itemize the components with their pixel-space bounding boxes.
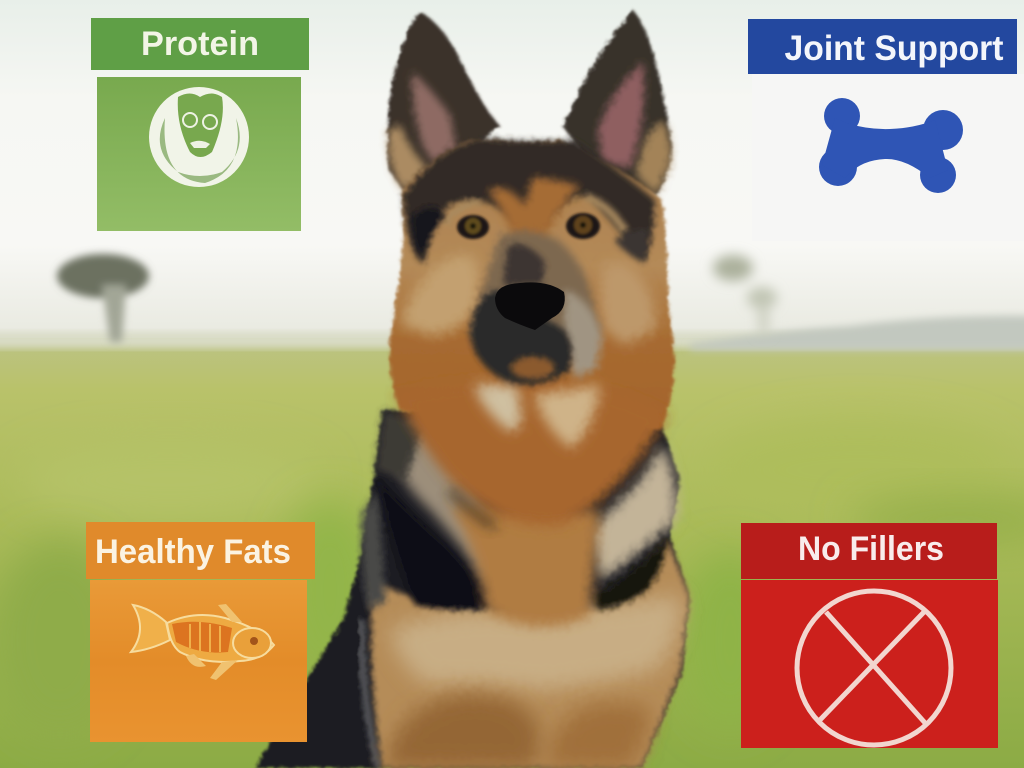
- left eye: [457, 215, 489, 239]
- dark back and haunch: [255, 410, 690, 768]
- german shepherd dog: [255, 10, 690, 768]
- right ear inner: [598, 62, 644, 168]
- muzzle bridge: [470, 231, 600, 335]
- cream chest band: [390, 595, 681, 690]
- protein header: [91, 18, 309, 70]
- lower body cream: [371, 540, 690, 768]
- left ear inner: [412, 72, 456, 172]
- grey back stripe: [362, 620, 378, 768]
- tan brow left: [445, 202, 480, 225]
- icon: fish: [131, 604, 274, 680]
- no fillers heading: No Fillers: [798, 530, 944, 568]
- tan forehead: [488, 178, 580, 240]
- mouth: [511, 357, 555, 379]
- right ear tan base: [636, 122, 671, 195]
- chest under fold shade: [450, 490, 495, 527]
- cream tuft right: [535, 385, 600, 448]
- dark forehead band: [403, 138, 655, 262]
- left ear tan base: [388, 125, 432, 190]
- joint support card: [752, 74, 1024, 241]
- black eye patch left: [412, 208, 445, 265]
- dark patch right: [615, 229, 648, 262]
- icon: crossed circle: [797, 591, 951, 745]
- blurred tree left: [57, 254, 149, 342]
- joint support heading: Joint Support: [784, 29, 1004, 68]
- tan brow right: [585, 197, 625, 232]
- neck lower blend: [396, 380, 668, 525]
- left ear: [388, 12, 500, 190]
- joint support header: [748, 19, 1017, 74]
- icon: bone: [819, 98, 963, 193]
- distant hills: [690, 316, 1024, 350]
- dark ruff top left: [376, 410, 425, 480]
- panel: protein: [91, 18, 309, 231]
- muzzle dark: [470, 290, 572, 385]
- panel: joint support: [748, 19, 1024, 241]
- healthy fats card: [90, 580, 307, 742]
- muzzle light right side: [565, 290, 602, 378]
- black band left: [378, 480, 490, 609]
- head base: [390, 140, 674, 430]
- cream tuft left: [474, 385, 520, 432]
- protein heading: Protein: [141, 25, 259, 63]
- no fillers card: [741, 580, 998, 748]
- nose: [495, 282, 565, 330]
- right eye: [566, 213, 600, 239]
- brown foreleg left: [385, 694, 540, 768]
- panel: no fillers: [741, 523, 998, 748]
- right ear: [563, 10, 672, 195]
- protein card: [97, 77, 301, 231]
- healthy fats heading: Healthy Fats: [95, 533, 291, 571]
- brown chest centre: [450, 505, 600, 626]
- cheek tan right: [600, 263, 656, 345]
- blurred tree right: [713, 255, 777, 334]
- no fillers header: [741, 523, 997, 579]
- icon: protein face: [149, 87, 249, 187]
- brown foreleg right: [547, 703, 650, 768]
- black band right: [592, 535, 668, 610]
- cream and grey ruff left: [392, 420, 500, 585]
- cream ruff right: [590, 445, 677, 580]
- healthy fats header: [86, 522, 315, 579]
- panel: healthy fats: [86, 522, 315, 742]
- cheek tan left: [402, 255, 479, 335]
